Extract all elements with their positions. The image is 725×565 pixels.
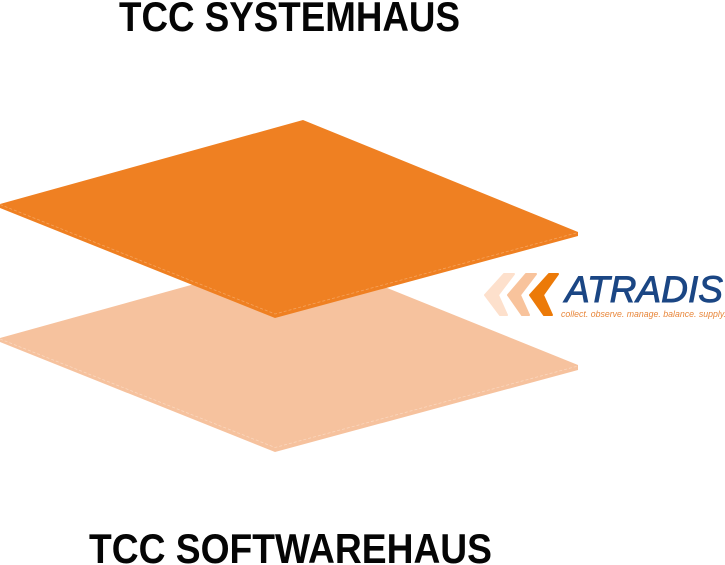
layer: light lower plate <box>0 254 578 452</box>
layer: orange upper plate <box>0 120 578 318</box>
icon: chevrons <box>485 274 558 315</box>
logo: Atradis <box>485 269 725 320</box>
logo wordmark: ATRADIS <box>563 269 723 310</box>
